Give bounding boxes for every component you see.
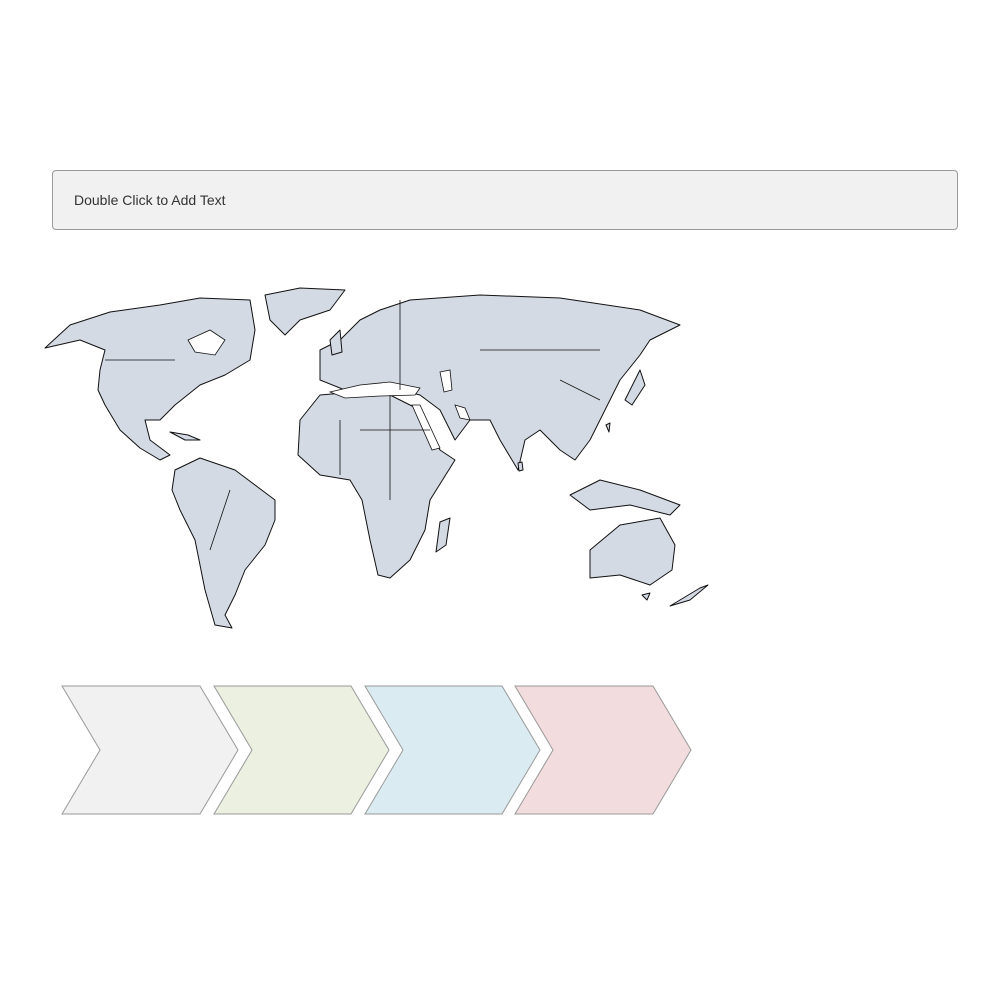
chevron 1 (62, 686, 238, 814)
africa (298, 392, 455, 578)
new zealand (670, 585, 708, 606)
madagascar (436, 518, 450, 552)
chevron 4 (515, 686, 691, 814)
text box: Double Click to Add Text (74, 192, 226, 208)
borders (105, 300, 600, 550)
taiwan (606, 423, 610, 432)
inland water (188, 330, 470, 450)
uk (330, 330, 342, 355)
caribbean islands (170, 432, 200, 440)
australia (590, 518, 675, 585)
greenland (265, 288, 345, 335)
tasmania (642, 593, 650, 600)
japan (625, 370, 645, 405)
eurasia (320, 295, 680, 470)
north america (45, 298, 255, 460)
chevron 3 (365, 686, 540, 814)
south america (172, 458, 275, 628)
sri lanka (518, 462, 523, 471)
indonesia (570, 480, 680, 515)
chevron 2 (214, 686, 389, 814)
text box (52, 170, 958, 230)
